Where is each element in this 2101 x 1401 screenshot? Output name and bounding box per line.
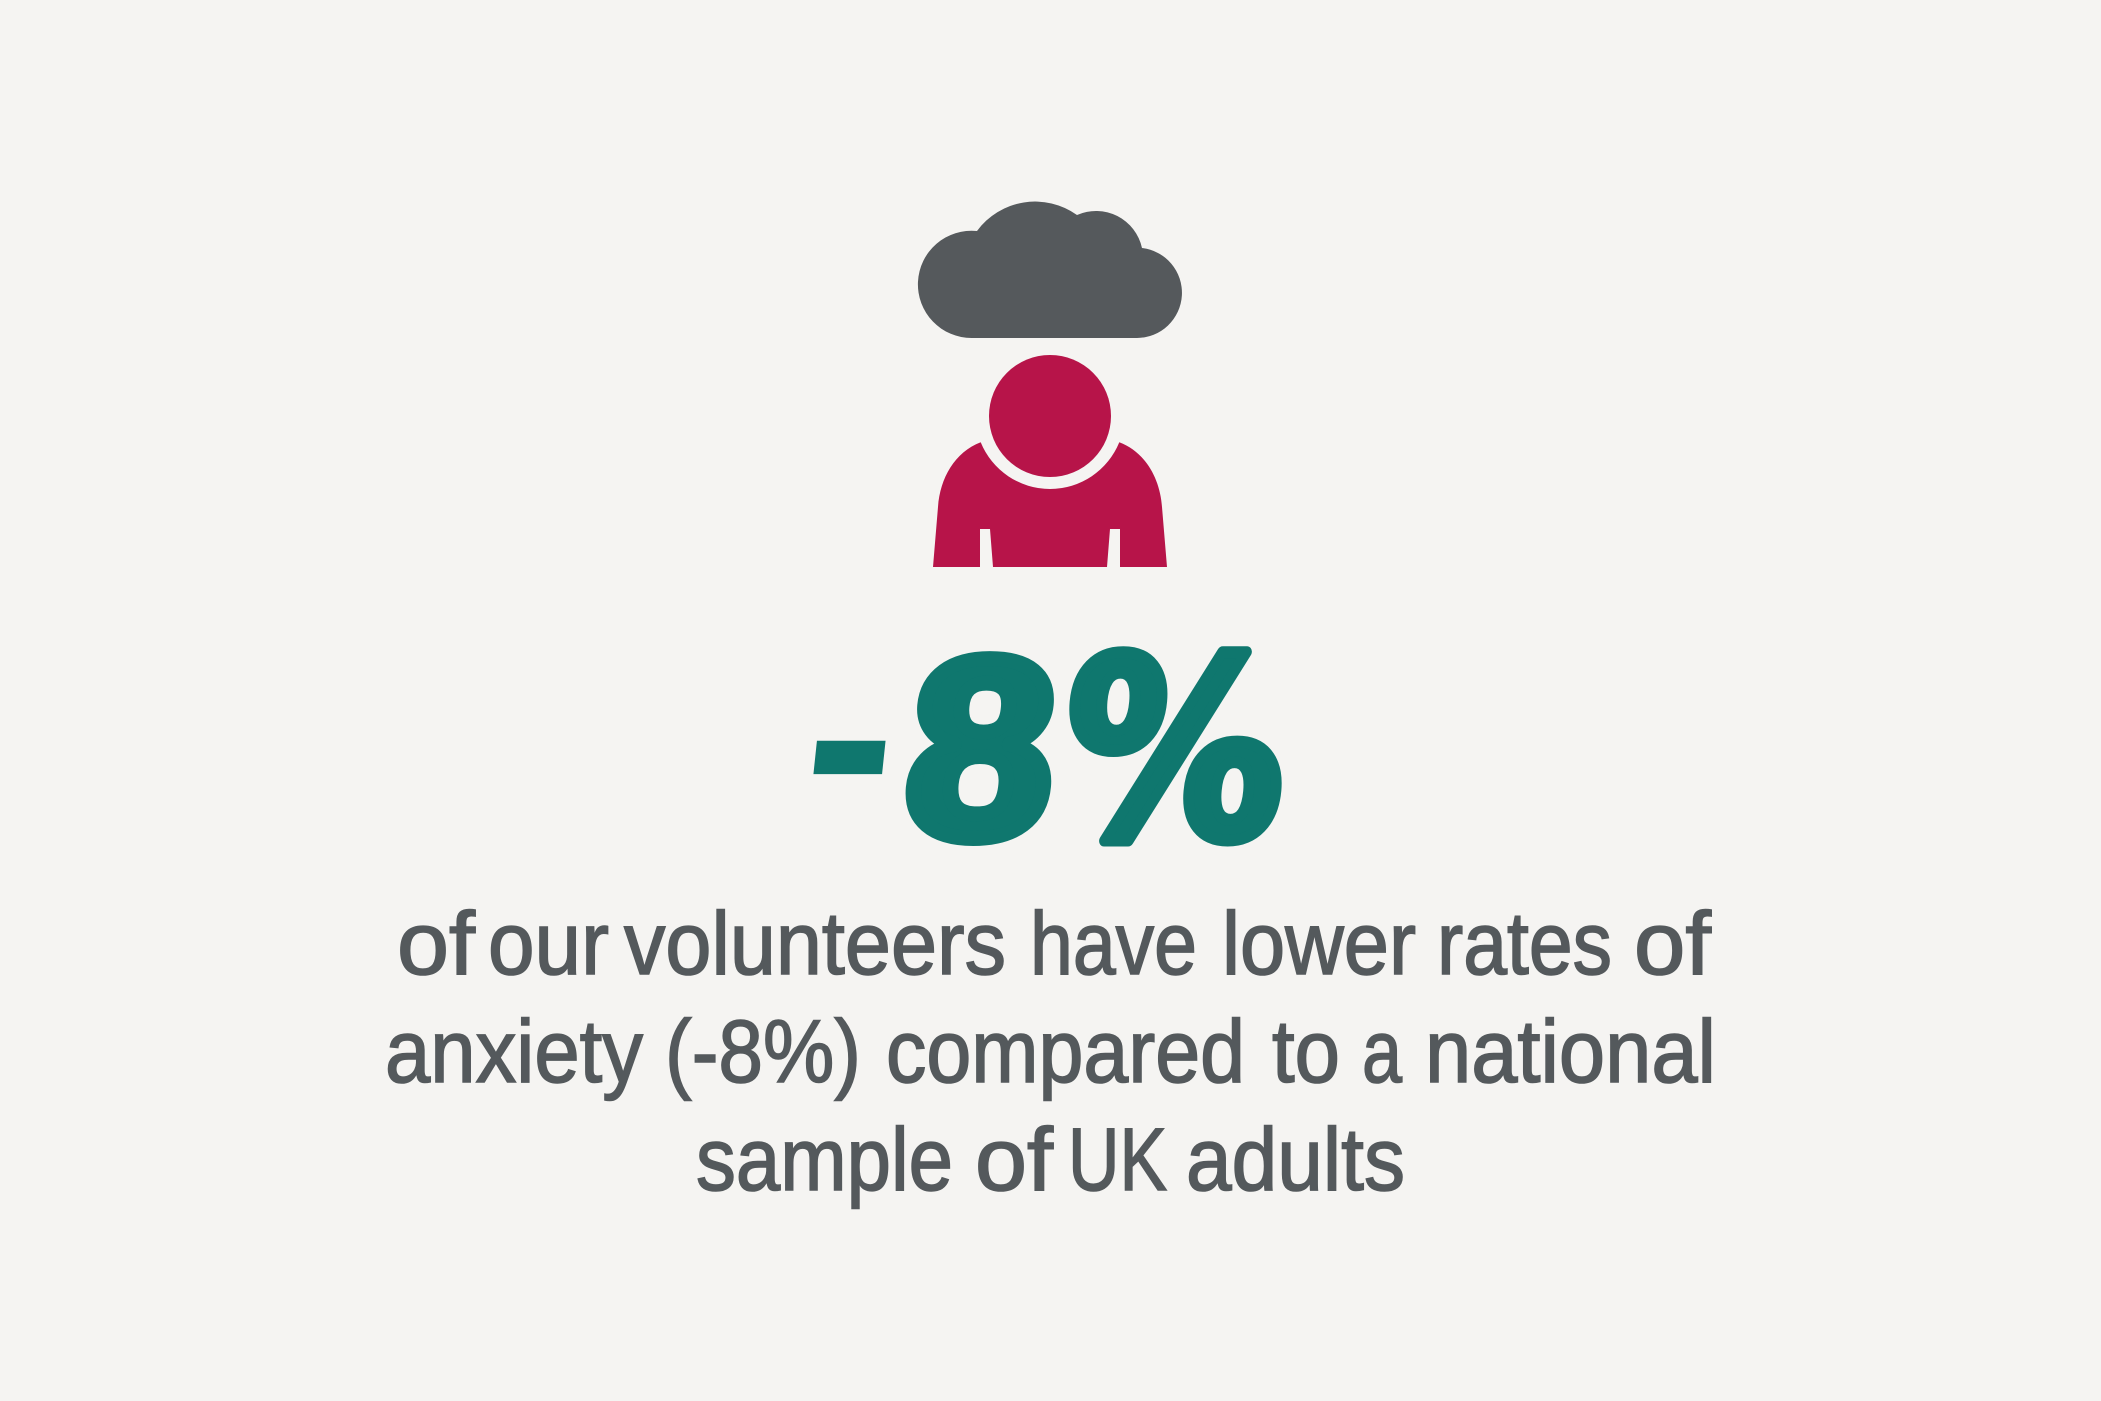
description text: compared [886,1001,1245,1101]
description text: sample [696,1109,953,1209]
description text: rates [1437,893,1612,993]
description text: lower [1222,893,1416,993]
description text: of [397,893,475,993]
description text: UK [1068,1109,1167,1209]
headline statistic: -8%: 8 [896,606,1067,890]
description text [385,893,1716,1209]
icon: person [933,355,1167,567]
headline statistic: -8%: % [1051,605,1299,896]
icon: rain cloud [918,202,1182,338]
description text: (-8%) [665,1001,861,1101]
description text: have [1030,893,1197,993]
description text: national [1425,1001,1716,1101]
description text: adults [1186,1109,1405,1209]
description text: of [975,1109,1053,1209]
description text: anxiety [385,1001,643,1101]
description text: of [1634,893,1711,993]
description text: a [1362,1001,1402,1101]
headline statistic: -8%: - [791,578,914,890]
headline statistic: -8% [791,578,1299,896]
description text: to [1272,1001,1340,1101]
description text: our [488,893,609,993]
description text: volunteers [624,893,1006,993]
